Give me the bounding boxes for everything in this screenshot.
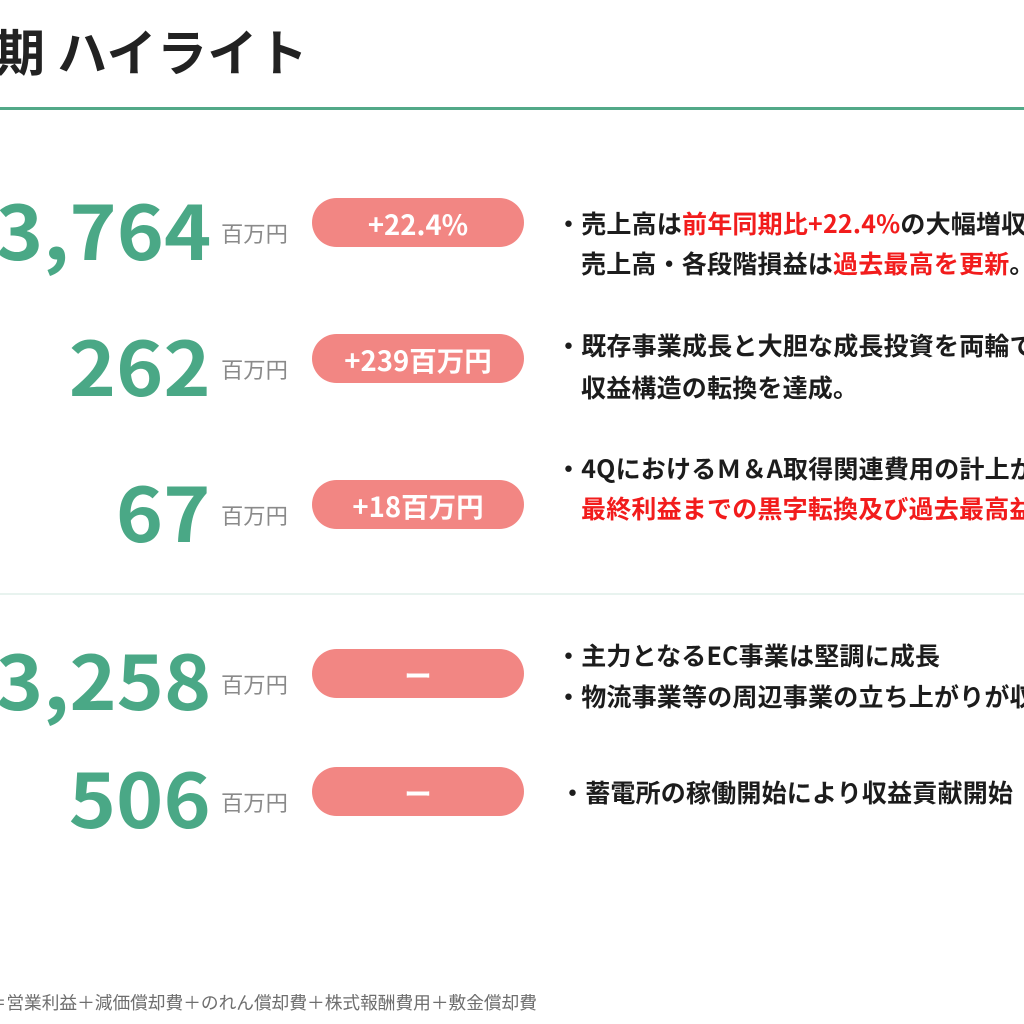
unit: 百万円 — [221, 353, 288, 385]
footnote: ＝営業利益＋減価償却費＋のれん償却費＋株式報酬費用＋敷金償却費 — [0, 989, 537, 1015]
change pill — [312, 649, 524, 698]
value: 67 — [116, 455, 211, 564]
commentary line 2: 最終利益までの黒字転換及び過去最高益 — [581, 490, 1024, 526]
change pill: ー — [404, 654, 432, 694]
row: net sales — [0, 173, 524, 282]
change pill — [312, 480, 524, 529]
row: operating profit — [69, 309, 524, 418]
unit: 百万円 — [221, 499, 288, 531]
unit: 百万円 — [221, 668, 288, 700]
commentary: ・4QにおけるＭ＆A取得関連費用の計上が — [556, 450, 1024, 486]
change pill — [312, 767, 524, 816]
section divider — [0, 593, 1024, 595]
change pill: +22.4% — [368, 203, 468, 243]
change pill: +18百万円 — [352, 485, 484, 525]
change pill: ー — [404, 772, 432, 812]
title: 期 ハイライト — [0, 14, 308, 86]
change pill — [312, 198, 524, 247]
row: energy storage segment — [69, 741, 524, 850]
unit: 百万円 — [221, 217, 288, 249]
value: 506 — [69, 741, 211, 850]
header rule — [0, 107, 1024, 110]
change pill: +239百万円 — [344, 339, 492, 379]
change pill — [312, 334, 524, 383]
value: 3,258 — [0, 623, 211, 732]
unit: 百万円 — [221, 786, 288, 818]
commentary: ・蓄電所の稼働開始により収益貢献開始 — [560, 774, 1013, 810]
commentary line 2: 収益構造の転換を達成。 — [581, 369, 858, 405]
row: net profit — [116, 455, 524, 564]
value: 262 — [69, 309, 211, 418]
value: 3,764 — [0, 173, 211, 282]
commentary line 2: ・物流事業等の周辺事業の立ち上がりが収 — [556, 678, 1024, 714]
commentary line 2: 売上高・各段階損益は過去最高を更新。 — [581, 245, 1024, 281]
commentary: ・主力となるEC事業は堅調に成長 — [556, 637, 940, 673]
commentary: ・既存事業成長と大胆な成長投資を両輪で — [556, 327, 1024, 363]
row: EC segment — [0, 623, 524, 732]
commentary: ・売上高は前年同期比+22.4%の大幅増収 — [556, 205, 1024, 241]
